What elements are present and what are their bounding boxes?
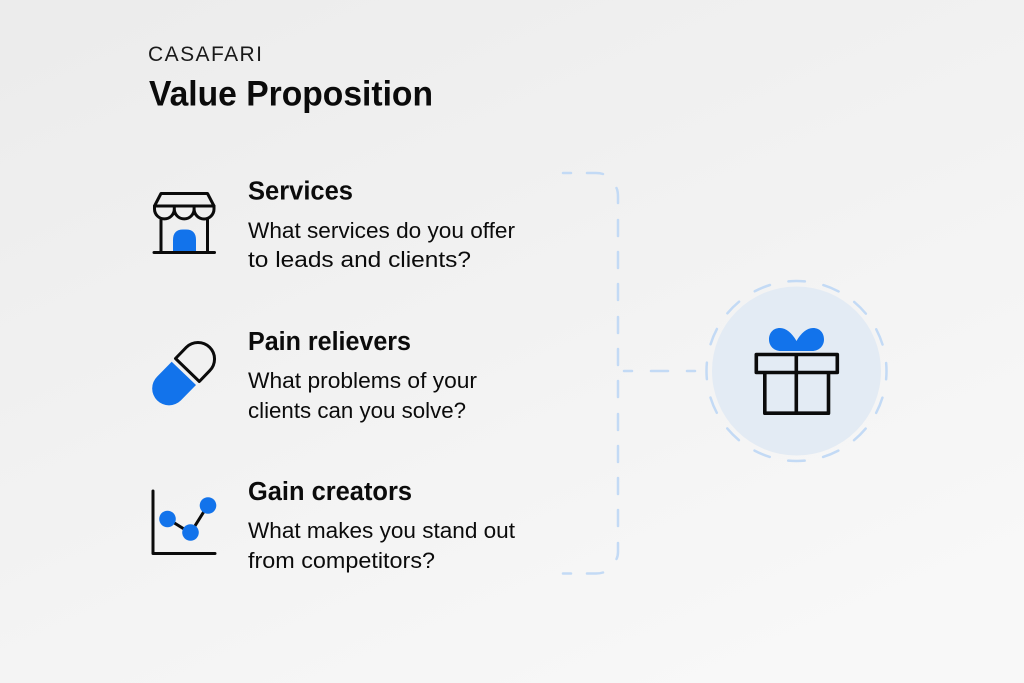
item: services: to leads and clients? — [248, 247, 471, 272]
icon: line chart — [153, 491, 216, 554]
title: Value Proposition — [149, 74, 433, 114]
icon: storefront — [154, 194, 214, 253]
icon: capsule — [152, 342, 215, 405]
item: gain creators — [153, 478, 516, 573]
heading: gain creators: Gain creators — [248, 478, 412, 506]
badge: gift — [706, 281, 886, 461]
connector: dashed bracket — [563, 173, 695, 574]
logo: CASAFARI: CASAFARI — [148, 43, 262, 66]
item: gain creators: from competitors? — [248, 548, 435, 573]
text: services question: What services do you offer — [248, 218, 515, 243]
heading: pain relievers: Pain relievers — [248, 328, 411, 356]
heading: services: Services — [248, 178, 353, 206]
text: gain creators question: What makes you stand out — [248, 518, 516, 543]
item: services — [154, 178, 515, 272]
text: pain relievers question: What problems of your — [248, 368, 478, 393]
item: pain relievers: clients can you solve? — [248, 398, 466, 423]
icon: gift box — [756, 328, 837, 413]
item: pain relievers — [152, 328, 478, 423]
